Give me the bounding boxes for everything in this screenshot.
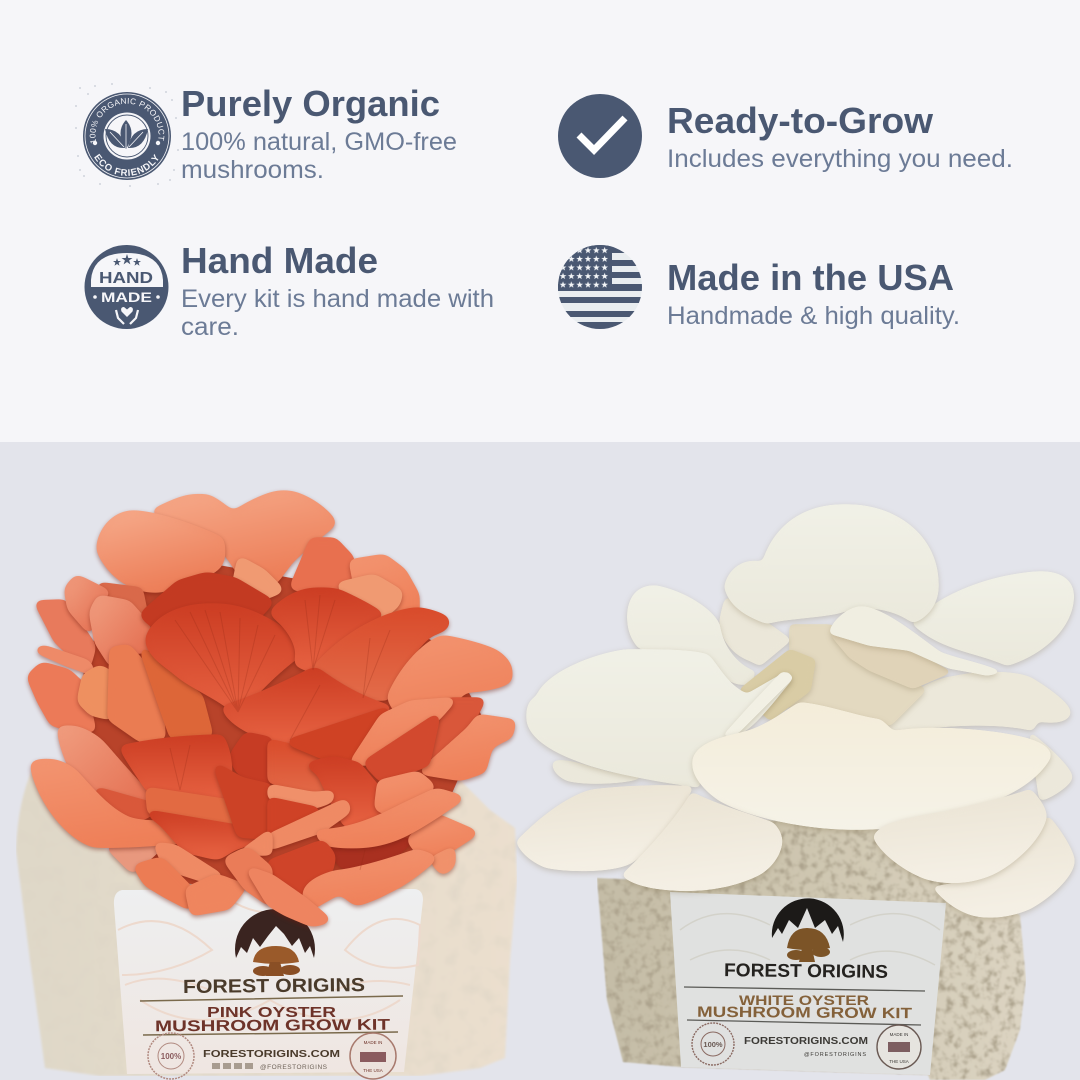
grow bag: white kit [597, 820, 1026, 1080]
seal: 100 percent [148, 1033, 194, 1079]
logo: forest origins [235, 909, 315, 976]
text: purely organic description [181, 128, 457, 184]
feature: made in the usa [558, 245, 960, 330]
text: hand made description [181, 285, 494, 341]
icon: organic eco friendly seal: 100% ORGANIC PRODUCT [90, 98, 164, 144]
seal: made in usa: MADE IN [890, 1032, 908, 1037]
label text: product name [697, 992, 912, 1022]
product label: pink oyster: @FORESTORIGINS [260, 1064, 328, 1071]
label text: website: FORESTORIGINS.COM [744, 1035, 868, 1047]
label text: product name: MUSHROOM GROW KIT [697, 1004, 912, 1022]
grow bag: pink kit [16, 768, 517, 1076]
product label: white oyster [670, 892, 946, 1075]
icon: organic eco friendly seal: ECO FRIENDLY [94, 154, 158, 176]
logo: forest origins [772, 898, 844, 962]
icon: hand made badge [84, 245, 168, 329]
text: ready to grow description: Includes everything you need. [667, 145, 1013, 173]
label text: product name: WHITE OYSTER [739, 992, 869, 1008]
text: hand made description: care. [181, 313, 239, 341]
seal: 100 percent: 100% [703, 1040, 723, 1049]
heading: ready to grow: Ready-to-Grow [667, 100, 934, 141]
feature: ready to grow [558, 94, 1013, 178]
heading: hand made: Hand Made [181, 240, 378, 281]
label text: website: FORESTORIGINS.COM [203, 1048, 340, 1060]
text: purely organic description: mushrooms. [181, 156, 324, 184]
pink oyster mushroom cluster [30, 493, 513, 924]
product label: pink oyster [114, 889, 423, 1079]
label text: product name: MUSHROOM GROW KIT [155, 1017, 391, 1035]
seal: made in usa: MADE IN [364, 1040, 382, 1045]
icon: organic eco friendly seal [75, 83, 179, 187]
gills of the pink caps [170, 595, 390, 870]
seal: 100 percent: 100% [161, 1052, 181, 1061]
seal: made in usa: THE USA [889, 1059, 909, 1064]
seal: made in usa: THE USA [363, 1068, 383, 1073]
seal: 100 percent [692, 1023, 734, 1065]
feature: hand made [84, 240, 494, 341]
product label: white oyster: @FORESTORIGINS [804, 1052, 866, 1058]
label text: product name: PINK OYSTER [207, 1004, 336, 1021]
background: top panel [0, 0, 1080, 442]
panel: features [75, 83, 1013, 341]
background: product panel [0, 442, 1080, 1080]
icon: hand made badge: MADE [101, 289, 152, 305]
product: white oyster mushroom grow kit [517, 505, 1074, 1080]
icon: hand made badge: HAND [99, 270, 153, 287]
label text: brand name: FOREST ORIGINS [724, 959, 888, 982]
label text: brand name: FOREST ORIGINS [183, 975, 365, 998]
white oyster mushroom cluster [517, 505, 1074, 917]
feature: purely organic [75, 83, 457, 187]
icon: check mark [558, 94, 642, 178]
text: made in the usa description: Handmade & high quality. [667, 302, 960, 330]
heading: purely organic: Purely Organic [181, 83, 440, 124]
icon: us flag circle [558, 245, 642, 329]
product: pink oyster mushroom grow kit [16, 493, 517, 1079]
text: purely organic description: 100% natural, GMO-free [181, 128, 457, 156]
seal: made in usa [350, 1033, 396, 1079]
seal: made in usa [877, 1025, 921, 1069]
label text: product name [155, 1004, 391, 1035]
heading: made in the usa: Made in the USA [667, 257, 954, 298]
text: hand made description: Every kit is hand made with [181, 285, 494, 313]
